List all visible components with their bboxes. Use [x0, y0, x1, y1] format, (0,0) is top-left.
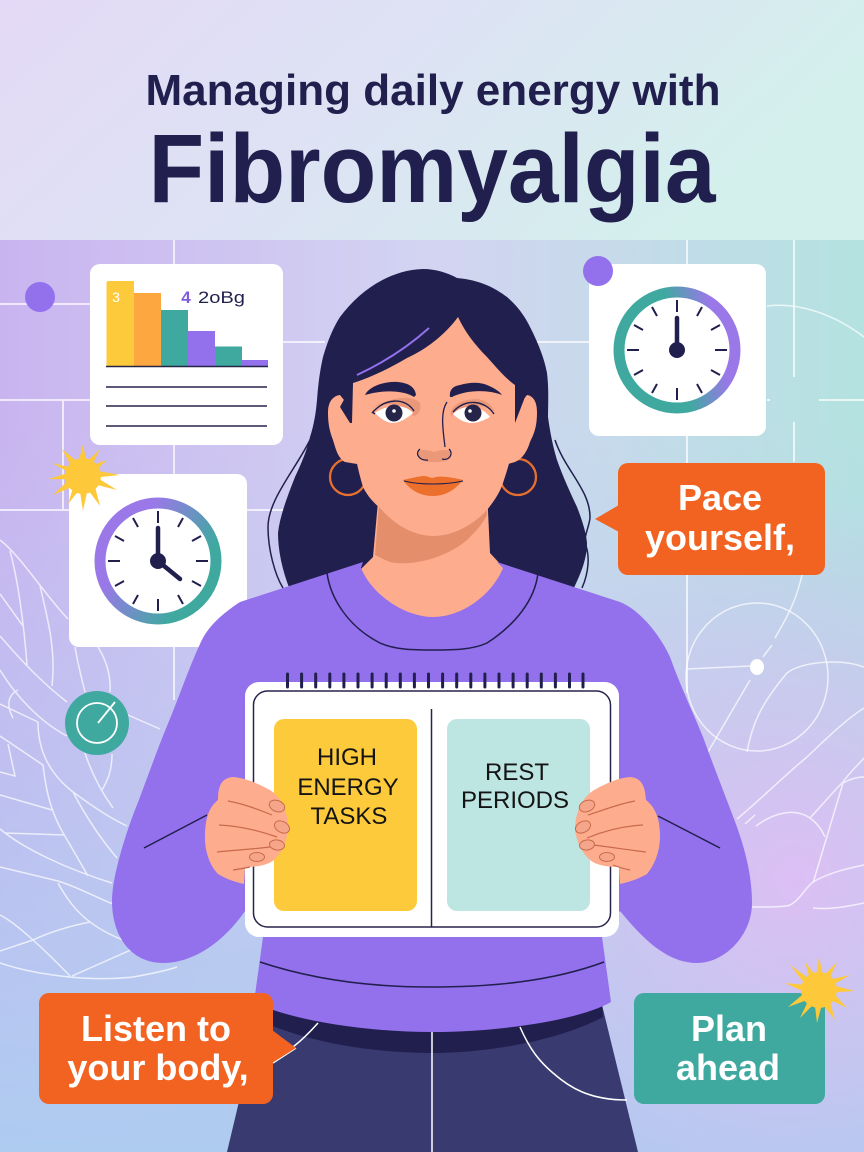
panel: high energy tasks: TASKS — [311, 803, 387, 830]
teal badge icon — [65, 691, 129, 755]
pants seams — [273, 1023, 627, 1152]
bars — [106, 281, 268, 366]
eye shadow — [372, 398, 495, 416]
clock hands — [675, 318, 679, 350]
title line 1: Managing daily energy with — [146, 66, 720, 115]
bar chart card: 4 — [181, 288, 191, 307]
panel: rest periods: REST — [485, 759, 549, 786]
sparkle: bottom right — [785, 957, 855, 1023]
panel: rest periods: PERIODS — [461, 787, 569, 814]
callout: listen to your body: your body, — [67, 1047, 249, 1088]
lips — [403, 476, 463, 496]
panel: high energy tasks — [274, 719, 417, 911]
neck — [350, 490, 515, 630]
chart labels: 3 — [112, 289, 120, 305]
spiral binding — [288, 674, 583, 687]
pants — [227, 1005, 638, 1152]
left hand — [205, 777, 292, 884]
clock card: top right — [589, 264, 766, 436]
hair — [278, 269, 587, 590]
sweater — [112, 562, 752, 1032]
callout: pace yourself — [595, 463, 825, 575]
panel: rest periods — [447, 719, 590, 911]
panel: high energy tasks: HIGH — [317, 744, 377, 771]
nose — [418, 402, 451, 462]
callout: pace yourself: yourself, — [645, 517, 795, 558]
sweater lines — [144, 573, 720, 987]
title line 2: Fibromyalgia — [148, 114, 716, 223]
callout: plan ahead — [634, 993, 825, 1104]
callout: plan ahead: ahead — [676, 1047, 780, 1088]
title — [146, 66, 720, 223]
dot: top right — [583, 256, 613, 286]
clock face — [100, 503, 216, 619]
callout: plan ahead: Plan — [691, 1008, 767, 1049]
right hand — [573, 777, 660, 884]
left earring — [330, 459, 366, 495]
sparkle: left — [48, 444, 120, 511]
callout: pace yourself: Pace — [678, 477, 762, 518]
background line art — [0, 240, 864, 979]
left ear — [328, 395, 357, 464]
hair outline strands — [268, 440, 590, 588]
dot: top left — [25, 282, 55, 312]
main illustration background — [0, 240, 864, 1152]
person — [112, 269, 752, 1152]
bar chart card: 2oBg — [198, 288, 245, 307]
bar chart card — [90, 264, 283, 445]
right earring — [500, 459, 536, 495]
callout: listen to your body: Listen to — [81, 1008, 231, 1049]
eyebrows — [365, 382, 502, 397]
callout: listen to your body — [39, 993, 296, 1104]
header band background — [0, 0, 864, 240]
notebook — [245, 674, 619, 937]
hair highlight — [357, 328, 429, 375]
neck shadow — [375, 500, 487, 563]
eyes — [372, 401, 494, 423]
clock hands — [158, 528, 180, 579]
clock card: left — [69, 474, 247, 647]
sideburns — [340, 383, 525, 423]
right ear — [508, 395, 537, 464]
face — [351, 317, 516, 536]
waistband — [268, 1000, 603, 1053]
clock face — [619, 292, 735, 408]
panel: high energy tasks: ENERGY — [297, 774, 399, 801]
